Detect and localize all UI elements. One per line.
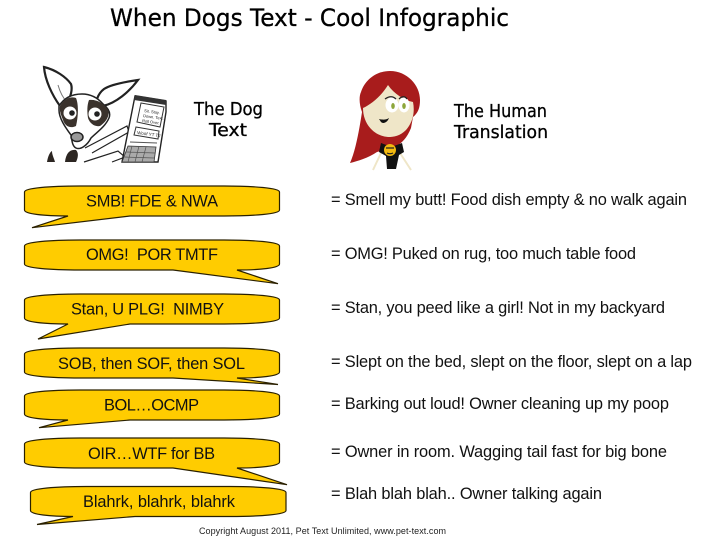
speech bubble: Stan: Stan, U PLG! NIMBY bbox=[71, 300, 224, 318]
translation: Blahrk: = Blah blah blah.. Owner talking again bbox=[331, 485, 602, 503]
heading: The Human Translation bbox=[453, 101, 548, 143]
speech bubble: OIR bbox=[24, 438, 287, 485]
heading: The Human Translation: The Human bbox=[453, 101, 547, 122]
translation: Stan: = Stan, you peed like a girl! Not in my backyard bbox=[331, 299, 665, 317]
speech bubble: BOL: BOL…OCMP bbox=[104, 396, 199, 414]
speech bubble: OMG: OMG! POR TMTF bbox=[86, 246, 218, 264]
icon: red haired human bbox=[350, 71, 420, 170]
smiley on shirt bbox=[384, 144, 396, 156]
eyes bbox=[386, 98, 398, 112]
phone screen text: Sit. Stay. bbox=[144, 108, 160, 115]
translation: BOL: = Barking out loud! Owner cleaning up my poop bbox=[331, 395, 669, 413]
speech bubble: OMG bbox=[24, 240, 280, 284]
speech bubble: SOB: SOB, then SOF, then SOL bbox=[58, 355, 245, 373]
icon: dog texting on phone bbox=[44, 67, 166, 162]
speech bubble: SMB: SMB! FDE & NWA bbox=[86, 192, 218, 210]
title: When Dogs Text - Cool Infographic bbox=[110, 4, 509, 32]
shirt bbox=[379, 143, 404, 169]
phone keypad bbox=[122, 146, 156, 162]
arms bbox=[373, 153, 411, 170]
speech bubble: SMB bbox=[24, 186, 280, 228]
dog arms bbox=[84, 126, 129, 162]
dog left ear bbox=[44, 67, 72, 106]
dog nose bbox=[71, 132, 83, 142]
translation: OMG: = OMG! Puked on rug, too much table food bbox=[331, 245, 636, 263]
speech bubble: OIR: OIR…WTF for BB bbox=[88, 445, 215, 463]
dog right ear bbox=[97, 80, 138, 106]
dog eyes bbox=[64, 106, 76, 120]
dog head bbox=[59, 94, 110, 149]
phone bbox=[122, 96, 166, 162]
translation: SOB: = Slept on the bed, slept on the floor, slept on a lap bbox=[331, 353, 692, 371]
icon: dog texting on phone: Roll Over. bbox=[142, 118, 160, 125]
mouth bbox=[379, 118, 389, 123]
face bbox=[363, 85, 414, 137]
copyright footer: Copyright August 2011, Pet Text Unlimited, www.pet-text.com bbox=[199, 526, 446, 536]
speech bubble: SOB bbox=[24, 348, 280, 384]
hair bbox=[350, 71, 420, 163]
icon: dog texting on phone: Woof YT TJ bbox=[137, 130, 161, 138]
dog eye patches bbox=[60, 97, 78, 127]
icon: dog texting on phone: Down. Text. bbox=[143, 113, 164, 121]
speech bubble: Blahrk: Blahrk, blahrk, blahrk bbox=[83, 493, 236, 511]
heading: The Dog Text: Text bbox=[208, 120, 247, 141]
speech bubble: BOL bbox=[24, 390, 280, 428]
heading: The Human Translation: Translation bbox=[453, 122, 548, 143]
dog tail and chest marks bbox=[47, 150, 78, 162]
translation: OIR: = Owner in room. Wagging tail fast for big bone bbox=[331, 443, 667, 461]
speech bubble: Stan bbox=[24, 294, 280, 339]
heading: The Dog Text bbox=[193, 99, 263, 141]
eyebrows bbox=[385, 97, 407, 99]
heading: The Dog Text: The Dog bbox=[193, 99, 263, 120]
speech bubble: Blahrk bbox=[30, 486, 286, 524]
translation: SMB: = Smell my butt! Food dish empty & no walk again bbox=[331, 191, 687, 209]
